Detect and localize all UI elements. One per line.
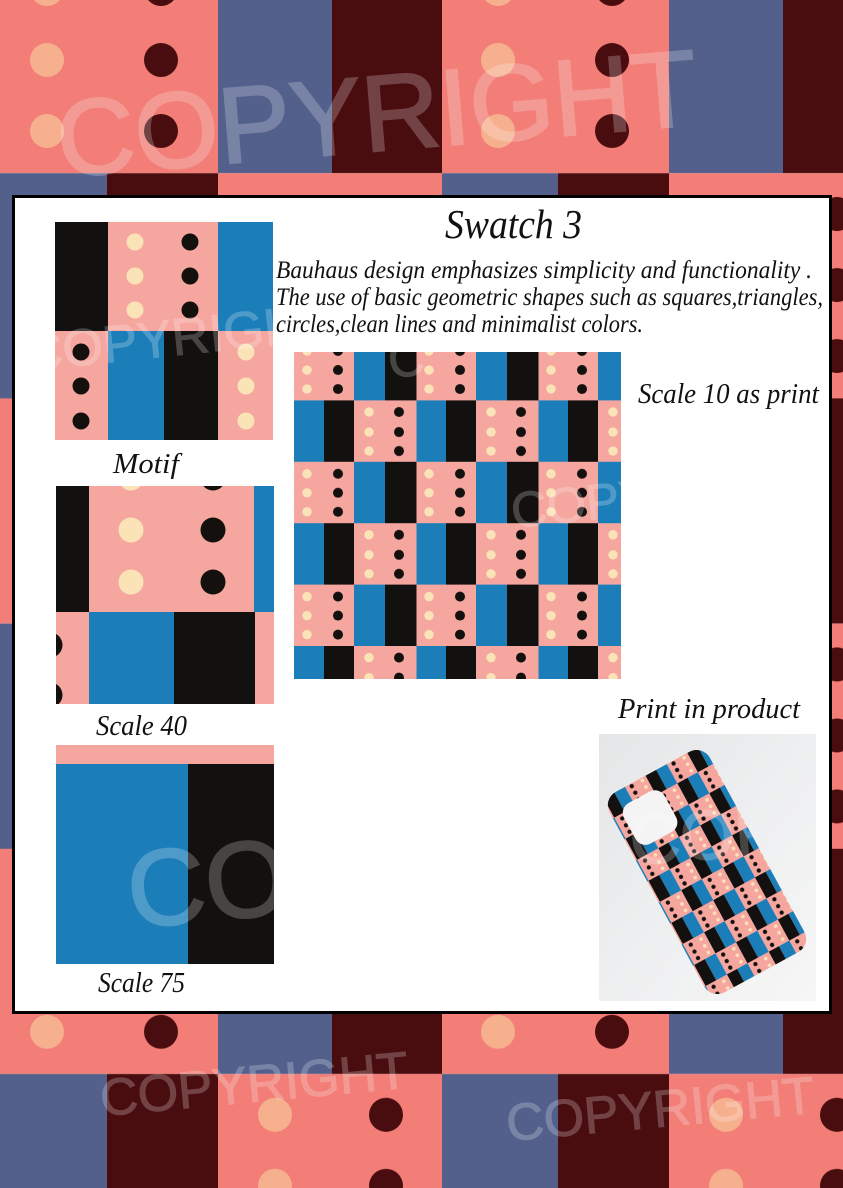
scale 75 swatch (56, 745, 274, 964)
watermark: motif: COPYRIGHT (22, 293, 336, 383)
description text (276, 257, 823, 338)
phone case with print (603, 745, 811, 999)
panel: swatch sheet (14, 196, 830, 1012)
print at scale 10 (294, 352, 621, 679)
caption: motif: Motif (112, 448, 183, 480)
title: Swatch 3 (445, 201, 582, 247)
description text: circles,clean lines and minimalist colors. (276, 311, 643, 338)
watermark: print: COPYRIGHT (508, 452, 810, 539)
motif swatch (55, 222, 273, 440)
caption: scale 10 as print: Scale 10 as print (638, 379, 820, 410)
camera cutout (619, 786, 681, 849)
watermark: phone: COPY (627, 787, 831, 880)
watermark: print: C (385, 329, 427, 389)
description text: Bauhaus design emphasizes simplicity and functionality . (276, 257, 812, 284)
watermark: print (390, 352, 621, 527)
product photo: phone case (599, 734, 816, 1001)
watermark: bottom right: COPYRIGHT (504, 1067, 817, 1153)
watermark: scale 75: COPYRIGHT (122, 770, 772, 951)
caption: print in product: Print in product (617, 694, 801, 725)
watermark: top: COPYRIGHT (52, 27, 702, 200)
caption: scale 75: Scale 75 (98, 968, 185, 999)
caption: scale 40: Scale 40 (96, 711, 187, 742)
watermark: bottom left: COPYRIGHT (98, 1042, 411, 1128)
scale 40 swatch (56, 486, 274, 704)
